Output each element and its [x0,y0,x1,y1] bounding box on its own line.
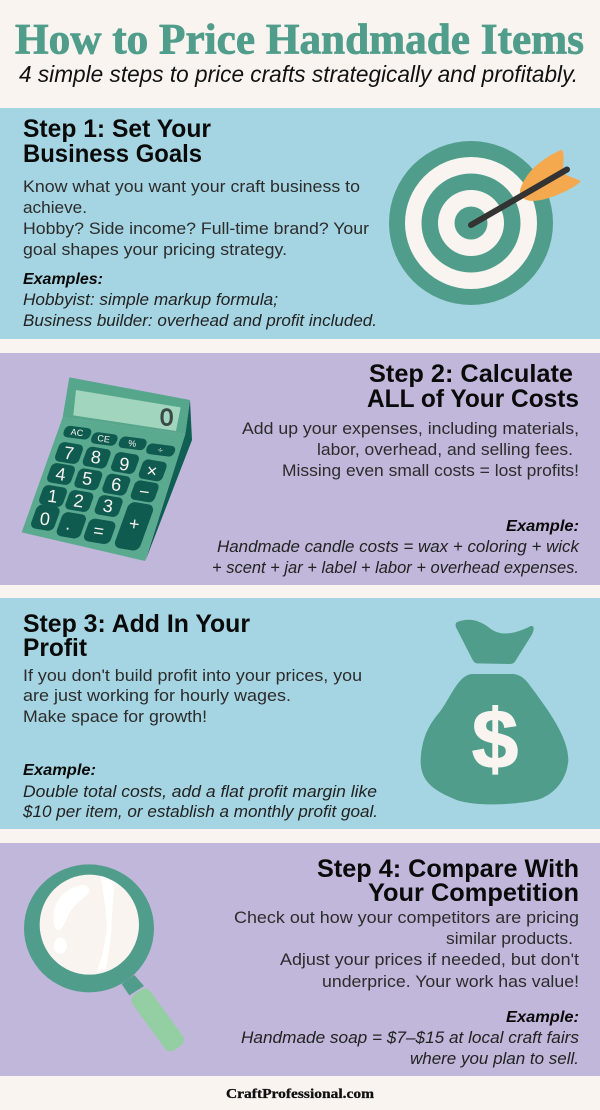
step 4 heading [317,855,579,907]
step 3 body text [23,667,362,726]
calculator key labels: % [128,438,137,449]
step 1 body text: achieve. [23,199,87,217]
step 4 example [241,1009,579,1068]
calculator key labels: + [128,513,141,535]
calculator key labels [39,427,164,542]
step 4 example: Handmade soap = $7–$15 at local craft fairs [241,1029,579,1047]
step 3 body text: Make space for growth! [23,708,207,726]
step 1 heading [23,115,211,168]
step 1 examples: Hobbyist: simple markup formula; [23,291,278,309]
step 4 heading: Step 4: Compare With [317,855,579,883]
step 1 body text: goal shapes your pricing strategy. [23,241,287,259]
step 4 heading: Your Competition [368,879,579,907]
step 1 heading: Business Goals [23,140,202,168]
calculator key labels: 2 [72,490,85,512]
calculator key labels: . [64,513,72,534]
step 2 body text: Missing even small costs = lost profits! [282,462,579,480]
icon: calculator [22,377,192,561]
panel: step 3 [0,598,600,829]
calculator key labels: 7 [63,443,75,464]
step 4 body text [234,909,579,991]
step 1 examples: Business builder: overhead and profit included. [23,312,377,330]
step 3 heading: Profit [23,634,88,662]
step 2 example: Example: [506,518,579,535]
calculator key labels: 3 [102,495,114,517]
step 3 body text: are just working for hourly wages. [23,687,291,705]
calculator key labels: = [92,520,105,542]
panel: step 2 [0,353,600,585]
step 1 examples [23,271,377,330]
step 3 example: $10 per item, or establish a monthly profit goal. [22,803,378,821]
calculator key labels: × [145,460,159,482]
step 3 example: Double total costs, add a flat profit margin like [23,783,377,801]
calculator key labels: AC [70,427,84,438]
step 3 body text: If you don't build profit into your prices, you [23,667,362,685]
step 2 example: + scent + jar + label + labor + overhead expenses. [212,559,579,577]
step 3 example [22,762,378,821]
step 4 body text: similar products. [446,930,573,948]
step 2 heading: Step 2: Calculate [369,360,573,388]
dollar sign: $ [472,693,518,786]
step 4 body text: underprice. Your work has value! [322,973,579,991]
step 2 heading [367,360,579,413]
calculator key labels: 6 [110,474,123,495]
step 3 heading [23,610,250,662]
step 4 example: Example: [506,1009,579,1026]
step 3 heading: Step 3: Add In Your [23,610,250,638]
icon: target with arrow [389,141,581,305]
calculator key labels: CE [97,433,111,445]
step 2 example [212,518,580,577]
footer url: CraftProfessional.com [226,1087,374,1102]
calculator key labels: 5 [81,468,94,489]
step 2 body text [242,420,579,480]
calculator key labels: 9 [118,454,131,475]
step 3 example: Example: [23,762,96,779]
step 2 example: Handmade candle costs = wax + coloring + wick [217,538,580,556]
title: How to Price Handmade Items [15,16,584,64]
calculator key labels: 4 [54,464,67,485]
step 1 examples: Examples: [23,271,103,288]
step 4 example: where you plan to sell. [410,1050,579,1068]
step 1 body text [23,178,370,259]
calculator display digit: 0 [160,405,173,432]
icon: money bag [421,620,568,804]
calculator key labels: 0 [39,508,51,530]
step 2 body text: labor, overhead, and selling fees. [317,441,573,459]
step 4 body text: Adjust your prices if needed, but don't [280,951,579,969]
calculator key labels: ÷ [157,445,164,455]
calculator key labels: 1 [46,486,59,507]
icon: magnifying glass [24,864,187,1054]
step 2 body text: Add up your expenses, including materials, [242,420,579,438]
panel: step 4 [0,843,600,1076]
step 1 body text: Know what you want your craft business to [23,178,360,196]
step 1 body text: Hobby? Side income? Full-time brand? Your [23,220,370,238]
calculator key labels: − [138,481,151,503]
step 4 body text: Check out how your competitors are pricing [234,909,579,927]
panel: step 1 [0,108,600,339]
step 2 heading: ALL of Your Costs [367,385,579,413]
step 1 heading: Step 1: Set Your [23,115,211,143]
calculator key labels: 8 [90,447,102,468]
subtitle: 4 simple steps to price crafts strategically and profitably. [19,61,578,87]
